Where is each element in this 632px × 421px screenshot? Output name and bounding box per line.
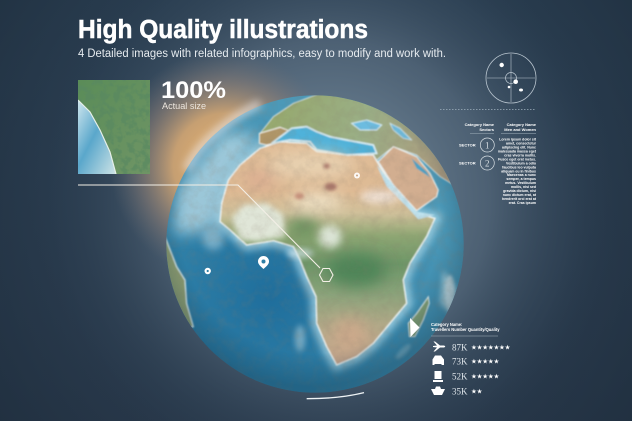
map pin: desert xyxy=(354,172,360,178)
body copy: cras viverra mollis. xyxy=(504,153,536,157)
globe xyxy=(160,90,473,403)
row: plane xyxy=(433,342,511,352)
row: plane: 87K xyxy=(452,342,468,352)
body copy: hendrerit orci erat at xyxy=(502,197,537,201)
stats heading: Travellers Number Quantity/Quality xyxy=(431,327,500,332)
column heading: men and women: Men and Women xyxy=(504,127,537,132)
body copy: mollis, nisi sed xyxy=(511,185,536,189)
arabia xyxy=(378,147,438,211)
column heading: sectors: Sectors xyxy=(479,127,495,132)
body copy: adipiscing elit. Nunc xyxy=(502,146,536,150)
dotted divider xyxy=(440,108,536,110)
stats heading xyxy=(431,322,500,332)
scale figure: 100%: 100% xyxy=(161,77,226,104)
column heading: men and women: Category Name xyxy=(507,122,537,127)
ocean xyxy=(160,90,473,403)
row: car: ★★★★★ xyxy=(471,358,499,366)
globe edge shading xyxy=(166,124,464,392)
row: car xyxy=(432,356,499,366)
red sea xyxy=(377,165,435,219)
madagascar xyxy=(408,297,429,337)
body copy: Lorem ipsum dolor sit xyxy=(499,138,537,142)
sector 2: SECTOR xyxy=(459,160,476,166)
atmospheric cloud rim xyxy=(187,103,260,170)
row: ship: ★★ xyxy=(471,388,483,396)
sector 2: 2 xyxy=(485,158,490,168)
hexagon marker xyxy=(320,268,333,282)
row: plane: ★★★★★★★ xyxy=(471,344,511,352)
desert outcrops xyxy=(295,163,337,199)
south america xyxy=(160,237,193,330)
body copy: aliquam eu in finibus xyxy=(501,169,536,173)
body copy: nunc dictum erat, at xyxy=(503,193,537,197)
body copy: faucibus leo vulputa xyxy=(502,165,536,169)
body copy: erat. Cras ipsum xyxy=(509,201,536,205)
sector 2 xyxy=(459,156,494,170)
body copy: gravida dictum, nisi xyxy=(503,189,536,193)
scale caption: Actual size xyxy=(162,101,206,112)
body copy: Fusce eget erat metus. xyxy=(498,157,536,161)
body copy: amet, consectetur xyxy=(506,142,537,146)
column heading: sectors: Category Name xyxy=(465,122,495,127)
body copy: malesuada massa eget xyxy=(498,149,537,153)
row: ship: 35K xyxy=(452,386,468,396)
terrain noise xyxy=(171,96,461,384)
sector table xyxy=(459,122,495,170)
radar chart xyxy=(486,53,536,103)
row: ship xyxy=(431,386,483,396)
row: car: 73K xyxy=(452,356,468,366)
map pin: small xyxy=(204,268,211,274)
heading: High Quality illustrations xyxy=(78,16,368,44)
indian ocean haze xyxy=(440,270,457,317)
row: train xyxy=(433,371,499,382)
africa xyxy=(220,142,435,365)
lorem text column xyxy=(498,122,537,205)
row: train: ★★★★★ xyxy=(471,372,499,380)
body copy: Maecenas a nunc xyxy=(507,173,536,177)
sector 1: 1 xyxy=(485,140,490,150)
subheading: 4 Detailed images with related infographics, easy to modify and work with. xyxy=(78,48,446,60)
inset satellite map xyxy=(78,80,150,174)
atlantic light haze xyxy=(173,133,260,233)
iberia xyxy=(259,127,292,145)
row: train: 52K xyxy=(452,372,468,382)
body copy: metus. Vestibulum xyxy=(505,181,536,185)
mediterranean xyxy=(272,127,377,155)
black sea xyxy=(352,120,382,130)
body copy: semper, a tempus xyxy=(506,177,536,181)
stats heading: Category Name: xyxy=(431,322,462,327)
europe and asia xyxy=(260,90,473,190)
map pin: large xyxy=(258,256,269,269)
sector 1: SECTOR xyxy=(459,142,476,148)
body copy xyxy=(498,138,537,205)
sector 1 xyxy=(459,138,494,152)
column heading: sectors xyxy=(465,122,495,132)
clouds xyxy=(203,190,455,361)
leader line to hexagon marker xyxy=(78,185,333,282)
white triangle pointer xyxy=(410,318,420,337)
column heading: men and women xyxy=(504,122,537,132)
landmasses xyxy=(166,95,452,366)
terrain tones xyxy=(243,152,387,350)
body copy: Vestibulum a odio xyxy=(506,161,536,165)
persian gulf xyxy=(412,158,430,177)
transport stats xyxy=(431,322,511,396)
base highlight xyxy=(307,393,364,399)
caspian xyxy=(390,123,412,140)
coastal shallows xyxy=(220,142,435,365)
